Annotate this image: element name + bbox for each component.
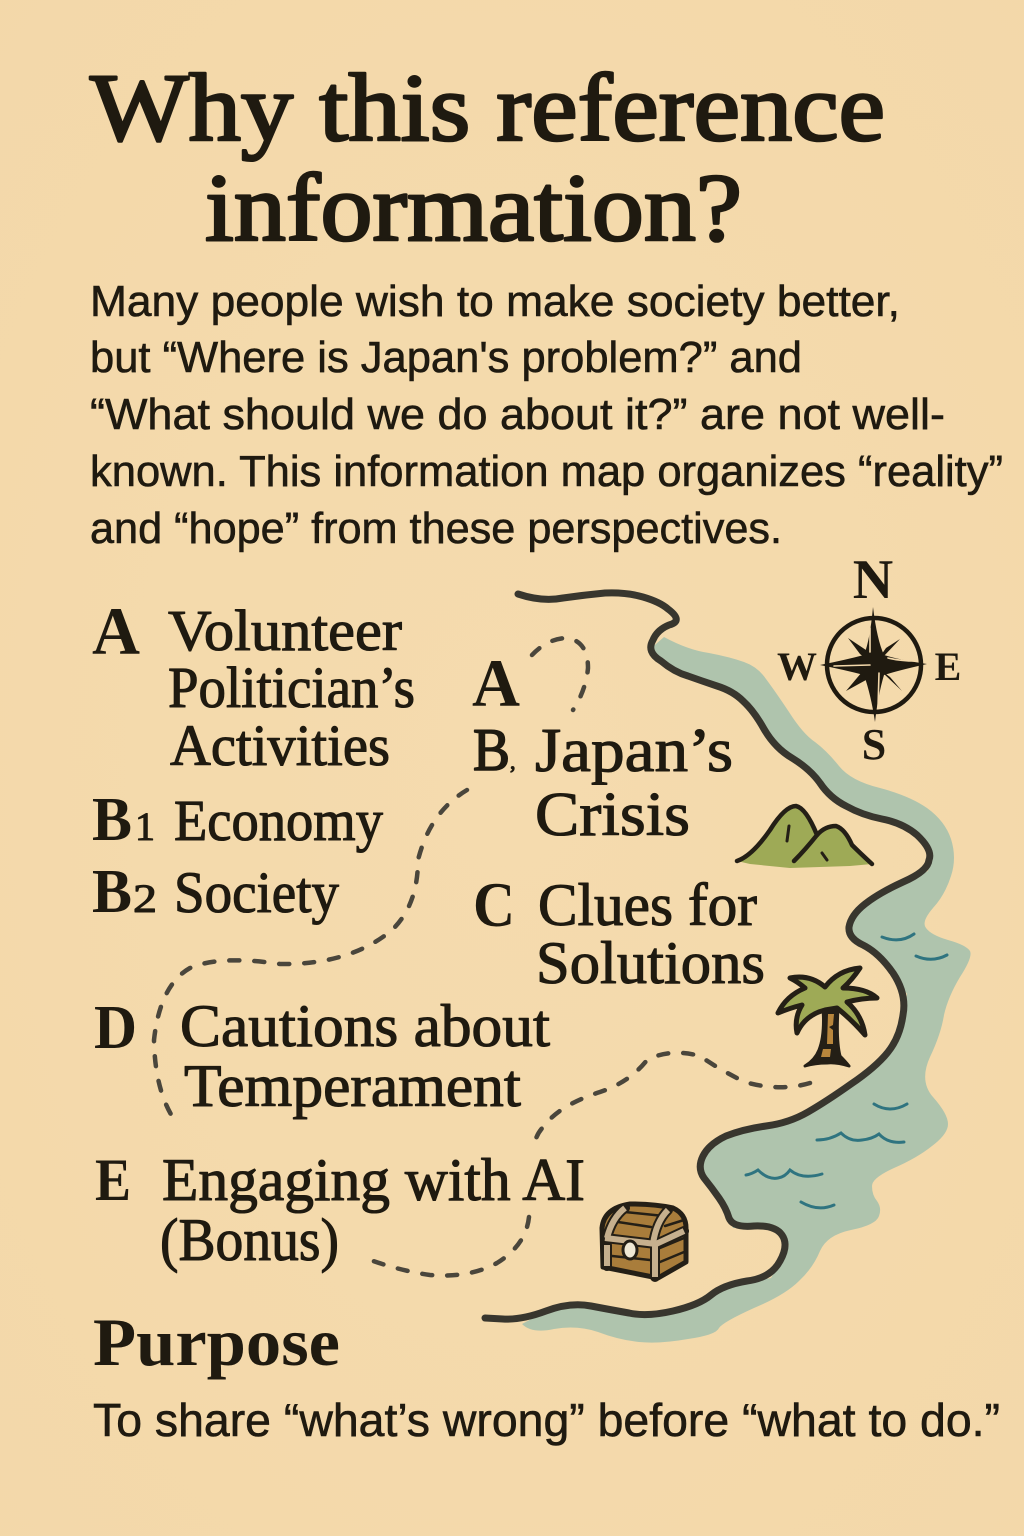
item list: A Volunteer Politician's Activities: Activities <box>170 713 390 778</box>
item: E Engaging with AI (Bonus): Engaging with AI <box>162 1147 585 1213</box>
route: dashed trail to chest <box>360 1217 529 1276</box>
item: E Engaging with AI (Bonus): E <box>95 1147 131 1213</box>
intro paragraph: “What should we do about it?” are not well- <box>90 390 945 439</box>
route: top dashed loop <box>532 638 588 710</box>
title <box>90 54 885 261</box>
intro paragraph: Many people wish to make society better, <box>90 277 900 326</box>
item list: B1 Economy: 1 <box>135 804 155 849</box>
item list: A Volunteer Politician's Activities: Politician’s <box>168 655 415 720</box>
compass letter E: E <box>935 644 961 689</box>
map label: C Clues for Solutions: C <box>473 869 515 940</box>
map label: B Japan's Crisis: Crisis <box>535 781 690 849</box>
intro paragraph: but “Where is Japan's problem?” and <box>90 333 802 382</box>
icon: mountains <box>737 806 872 868</box>
route: dashed trail to palm <box>535 1053 810 1145</box>
sea water <box>522 637 971 1343</box>
compass letter N: N <box>853 549 893 611</box>
purpose heading: Purpose <box>93 1304 340 1380</box>
chest lock <box>623 1241 637 1259</box>
chest strap outlines <box>605 1208 684 1277</box>
item list: B2 Society: 2 <box>133 876 157 921</box>
map label: B Japan's Crisis <box>473 717 733 849</box>
palm leaves <box>778 968 877 1035</box>
item list: B2 Society: Society <box>174 860 339 925</box>
coastline <box>485 593 930 1319</box>
item list: A Volunteer Politician's Activities <box>92 593 415 778</box>
compass rose <box>777 549 961 769</box>
palm trunk <box>805 1008 849 1066</box>
item list: B1 Economy: B <box>92 786 132 854</box>
sea waves <box>746 934 947 1208</box>
item list: A Volunteer Politician's Activities: A <box>92 593 140 669</box>
compass letter S: S <box>862 720 886 769</box>
icon: palm tree <box>778 968 877 1066</box>
intro paragraph <box>90 277 1003 553</box>
compass main star <box>820 607 927 722</box>
item: D Cautions about Temperament: Cautions about <box>180 993 550 1059</box>
compass ring <box>827 618 921 712</box>
map label: B Japan's Crisis: Japan’s <box>535 717 733 785</box>
map: coastline and sea <box>485 593 971 1343</box>
map label: A: A <box>472 645 520 721</box>
map label: B Japan's Crisis: B <box>473 717 510 783</box>
palm trunk segments <box>821 1014 834 1057</box>
item list: B1 Economy <box>92 786 383 854</box>
item list: B1 Economy: Economy <box>174 788 383 853</box>
map label: C Clues for Solutions <box>473 869 765 996</box>
item: E Engaging with AI (Bonus) <box>95 1147 585 1273</box>
map label: C Clues for Solutions: Solutions <box>536 930 765 996</box>
item list: A Volunteer Politician's Activities: Volunteer <box>168 598 402 663</box>
intro paragraph: known. This information map organizes “reality” <box>90 447 1003 496</box>
purpose statement: To share “what’s wrong” before “what to do.” <box>93 1394 1000 1446</box>
item list: B2 Society: B <box>92 858 132 926</box>
item list: B2 Society <box>92 858 339 926</box>
title: information? <box>205 154 742 261</box>
item: D Cautions about Temperament: D <box>94 994 137 1062</box>
chest plank lines <box>612 1212 684 1262</box>
item: D Cautions about Temperament <box>94 993 550 1119</box>
compass diagonal points <box>846 638 902 691</box>
item: D Cautions about Temperament: Temperament <box>184 1053 521 1119</box>
chest straps <box>605 1208 684 1277</box>
title: Why this reference <box>90 54 885 161</box>
route: long dashed trail on left <box>154 790 467 1125</box>
map label: C Clues for Solutions: Clues for <box>538 872 757 938</box>
icon: treasure chest <box>602 1204 686 1278</box>
map label: B Japan's Crisis: , <box>510 749 516 774</box>
compass star highlights <box>834 628 916 708</box>
item: E Engaging with AI (Bonus): (Bonus) <box>160 1207 339 1273</box>
intro paragraph: and “hope” from these perspectives. <box>90 504 782 553</box>
compass letter W: W <box>777 644 817 689</box>
chest body <box>602 1204 686 1278</box>
